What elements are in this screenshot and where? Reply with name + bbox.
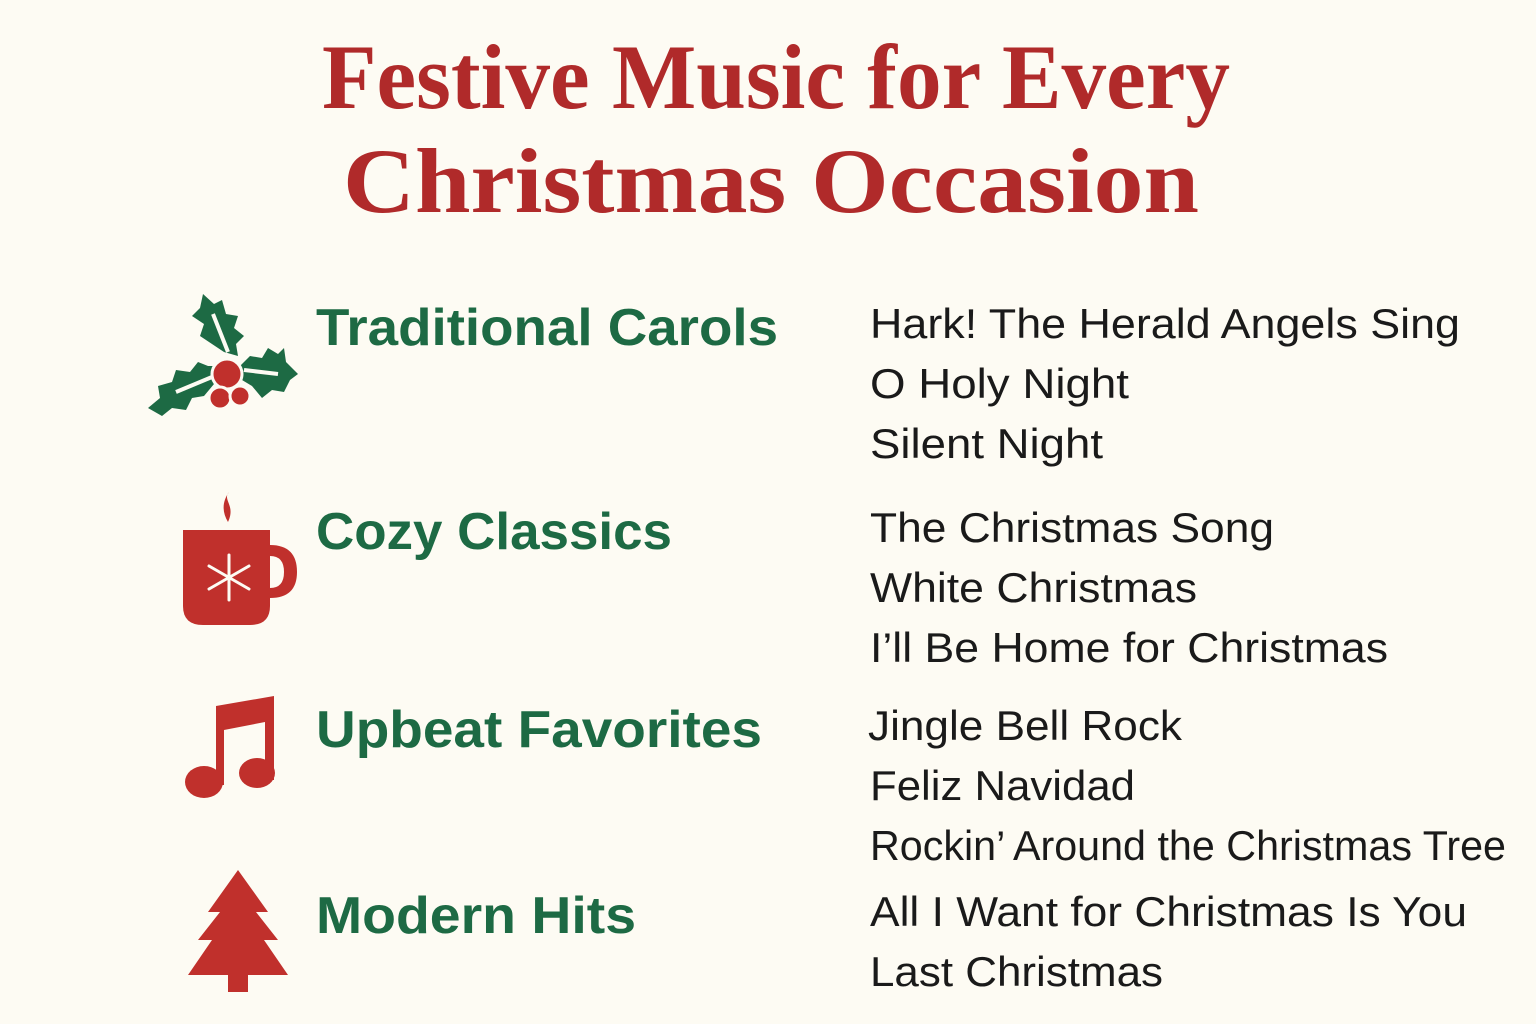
heading: traditional carols: Traditional Carols bbox=[316, 299, 778, 357]
heading: modern hits: Modern Hits bbox=[316, 887, 636, 945]
list: modern songs bbox=[870, 888, 1467, 995]
icon: holly bbox=[148, 294, 298, 416]
list: traditional carols songs: O Holy Night bbox=[870, 360, 1129, 407]
list: upbeat songs: Feliz Navidad bbox=[870, 762, 1135, 809]
list: traditional carols songs: Hark! The Herald Angels Sing bbox=[870, 300, 1460, 347]
title: Festive Music for Every bbox=[322, 26, 1230, 128]
icon: music note bbox=[185, 696, 275, 798]
icon: mug bbox=[183, 492, 297, 625]
list: cozy classics songs: I’ll Be Home for Christmas bbox=[870, 624, 1388, 671]
list: traditional carols songs bbox=[870, 300, 1460, 467]
list: cozy classics songs bbox=[870, 504, 1388, 671]
list: modern songs: Last Christmas bbox=[870, 948, 1163, 995]
icon: tree bbox=[188, 870, 288, 992]
list: cozy classics songs: The Christmas Song bbox=[870, 504, 1274, 551]
list: traditional carols songs: Silent Night bbox=[870, 420, 1103, 467]
list: cozy classics songs: White Christmas bbox=[870, 564, 1197, 611]
list: upbeat songs bbox=[868, 702, 1506, 869]
title: Christmas Occasion bbox=[343, 130, 1199, 232]
list: upbeat songs: Jingle Bell Rock bbox=[868, 702, 1183, 749]
title bbox=[322, 26, 1230, 232]
list: modern songs: All I Want for Christmas Is You bbox=[870, 888, 1467, 935]
heading: cozy classics: Cozy Classics bbox=[316, 503, 672, 561]
heading: upbeat favorites: Upbeat Favorites bbox=[316, 701, 762, 759]
list: upbeat songs: Rockin’ Around the Christmas Tree bbox=[870, 822, 1506, 869]
